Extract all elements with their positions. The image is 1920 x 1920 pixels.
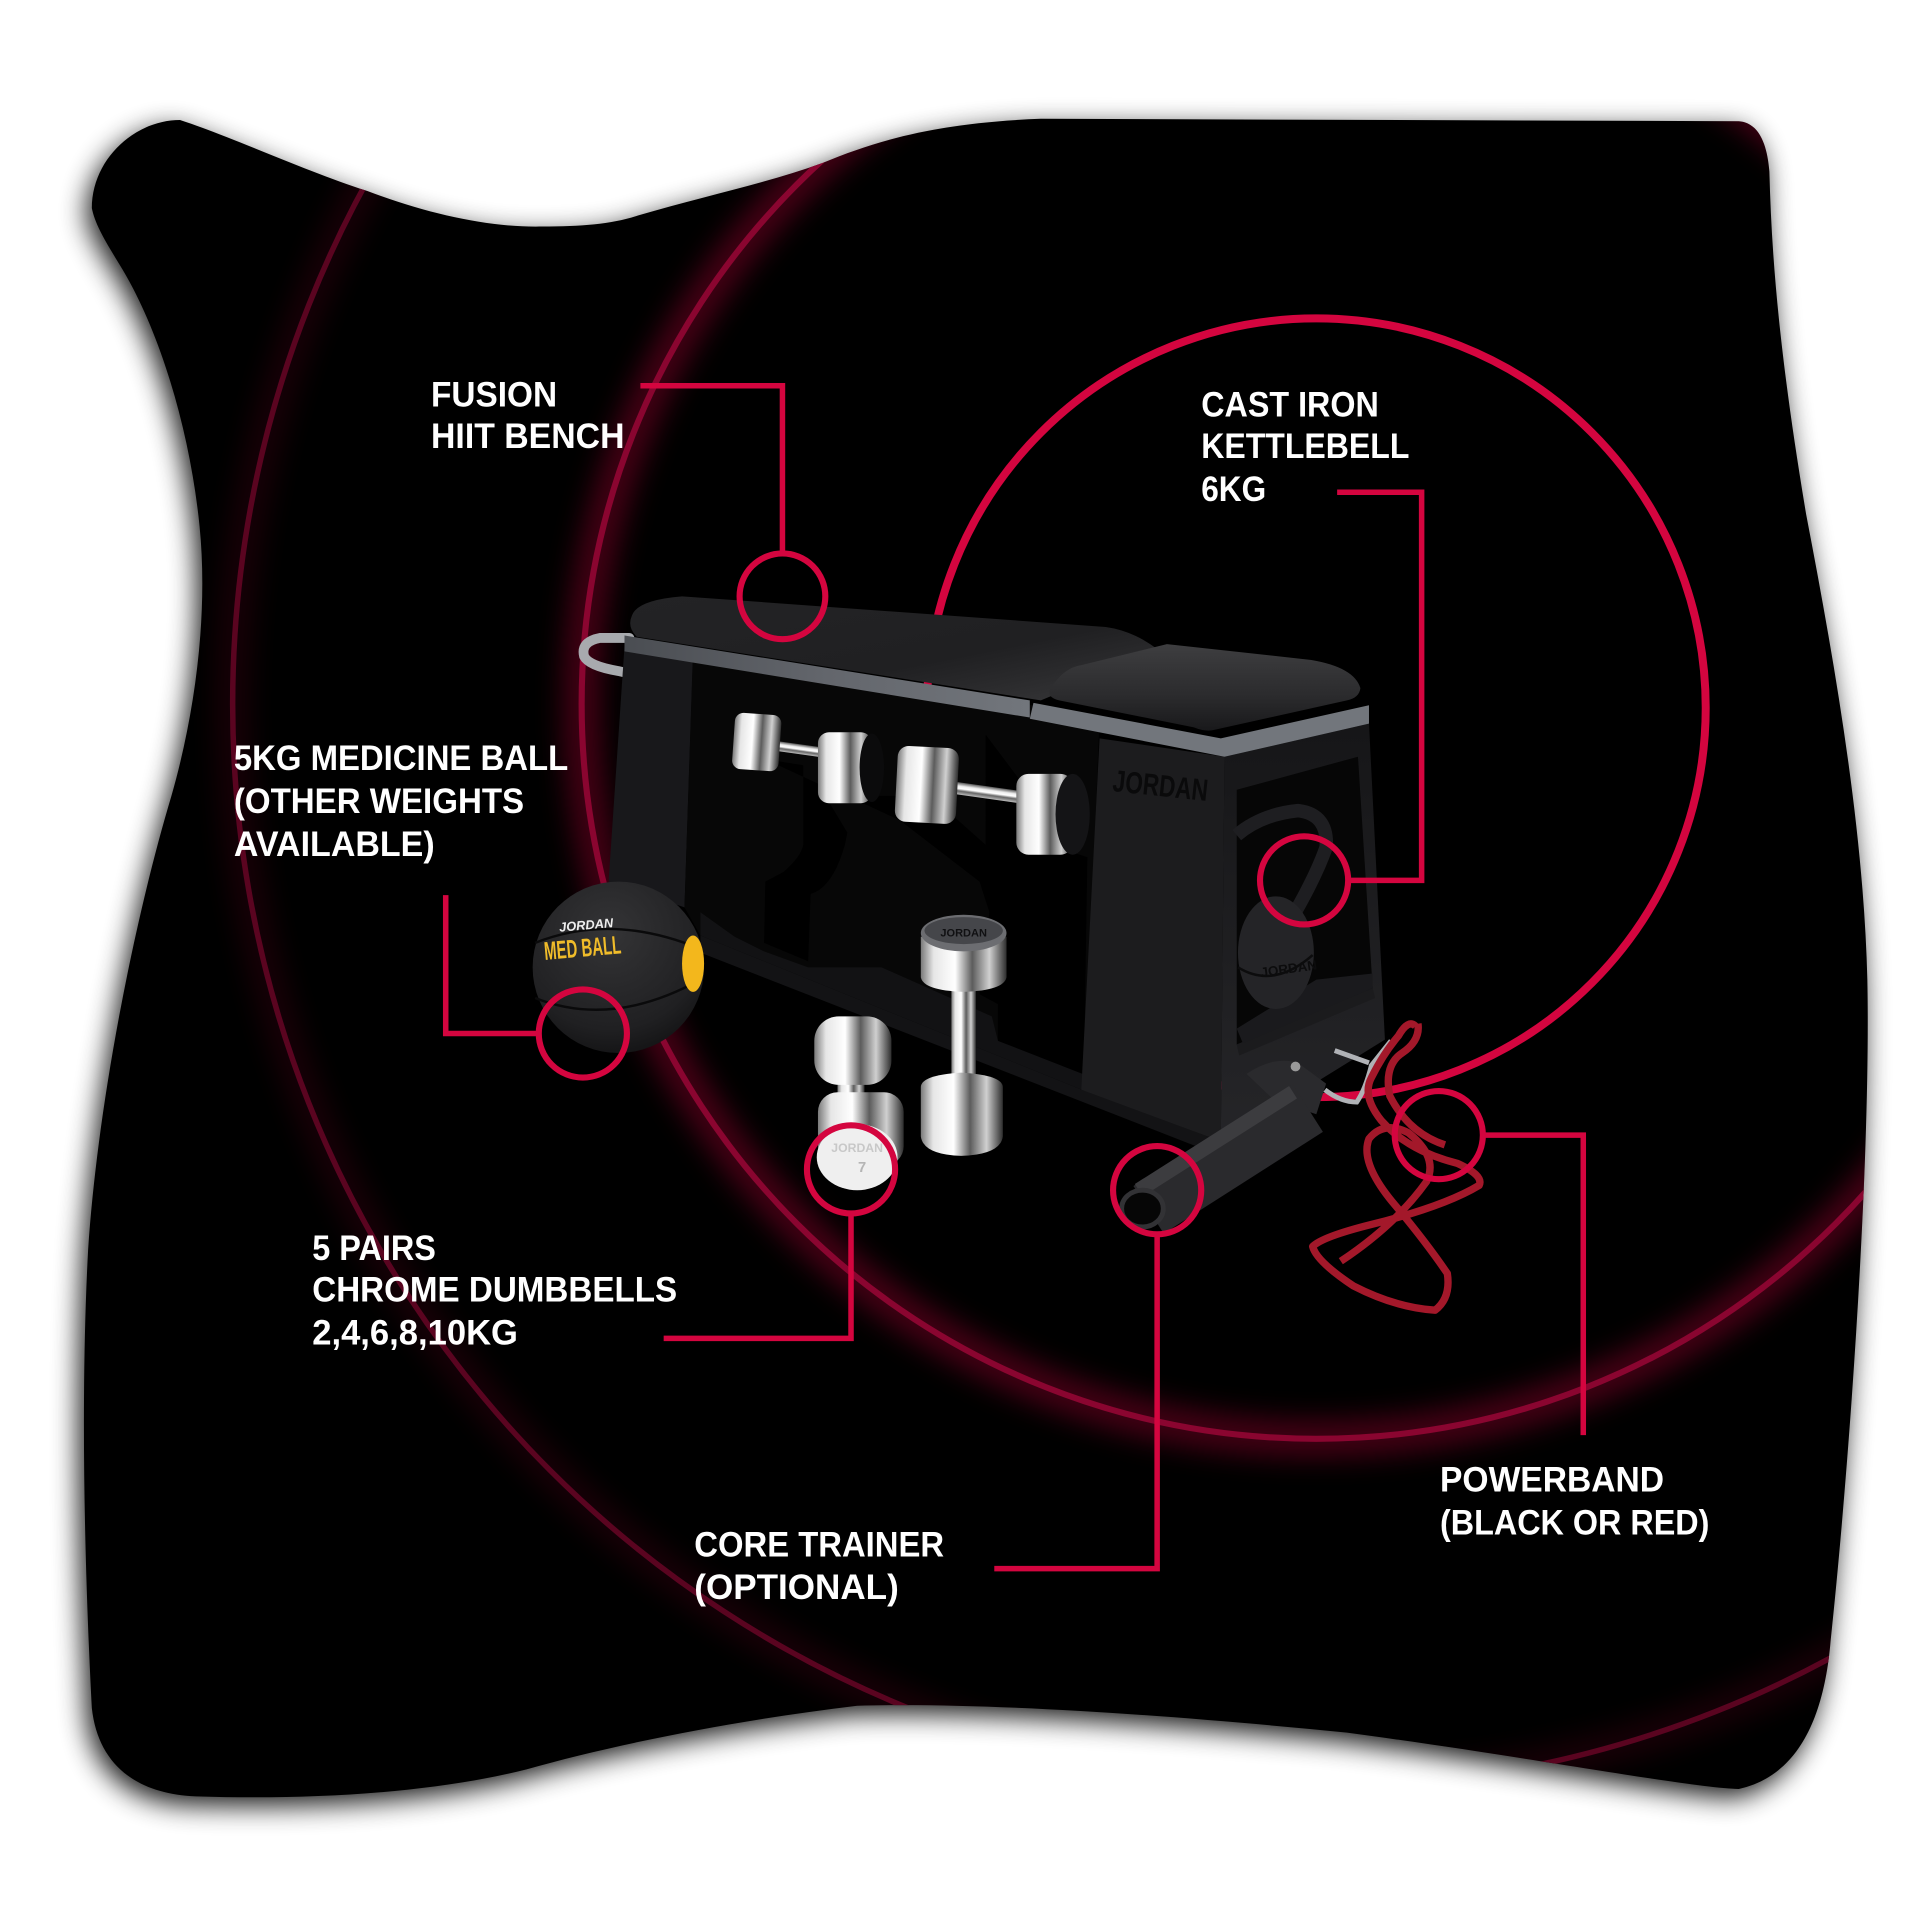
lying dumbbell: JORDAN bbox=[831, 1141, 883, 1155]
callout: kettlebell: CAST IRON bbox=[1201, 384, 1379, 424]
kettlebell: JORDAN bbox=[1260, 957, 1318, 980]
bench right front panel bbox=[1081, 738, 1224, 1141]
medicine ball: JORDAN bbox=[558, 915, 615, 935]
lying dumbbell: 7 bbox=[858, 1160, 866, 1176]
lying dumbbell bbox=[814, 1016, 904, 1190]
seat steel rim bbox=[624, 636, 1030, 718]
bench left leg bbox=[609, 647, 693, 907]
callout: chrome dumbbells: CHROME DUMBBELLS bbox=[312, 1270, 677, 1310]
callout: core trainer: CORE TRAINER bbox=[694, 1524, 944, 1564]
callout: kettlebell: KETTLEBELL bbox=[1201, 426, 1409, 466]
main seat pad bbox=[630, 596, 1157, 700]
branded lettering on bench: JORDAN bbox=[1111, 764, 1210, 808]
core trainer bbox=[1122, 1061, 1326, 1227]
bench handle bbox=[584, 638, 671, 683]
callout: Fusion HIIT Bench: FUSION bbox=[431, 375, 557, 415]
callout: powerband: POWERBAND bbox=[1440, 1459, 1664, 1499]
bench right side panel bbox=[1221, 724, 1385, 1141]
callout: powerband bbox=[1395, 1091, 1709, 1542]
callout: medicine ball: 5KG MEDICINE BALL bbox=[234, 738, 568, 778]
callout: chrome dumbbells bbox=[312, 1125, 895, 1352]
hook and pin bbox=[1325, 1041, 1391, 1102]
callout: core trainer bbox=[694, 1146, 1201, 1607]
callout: kettlebell: 6KG bbox=[1201, 469, 1266, 509]
callout: medicine ball bbox=[234, 738, 627, 1078]
callout: Fusion HIIT Bench bbox=[431, 375, 825, 639]
powerband bbox=[1313, 1024, 1480, 1310]
racked dumbbell 1 bbox=[732, 712, 884, 803]
kettlebell bbox=[1237, 811, 1326, 1009]
callout: medicine ball: AVAILABLE) bbox=[234, 824, 435, 864]
medicine ball: MED BALL bbox=[543, 931, 622, 966]
callout: Fusion HIIT Bench: HIIT BENCH bbox=[431, 416, 624, 456]
callout: medicine ball: (OTHER WEIGHTS bbox=[234, 781, 524, 821]
racked dumbbell 2 bbox=[894, 745, 1090, 855]
medicine ball bbox=[533, 882, 704, 1053]
callout: core trainer: (OPTIONAL) bbox=[694, 1567, 899, 1607]
small seat pad bbox=[1049, 644, 1360, 731]
callout: kettlebell bbox=[1201, 384, 1422, 924]
standing dumbbell: JORDAN bbox=[940, 928, 987, 940]
product: Fusion HIIT bench bbox=[533, 596, 1480, 1310]
callout: chrome dumbbells: 2,4,6,8,10KG bbox=[312, 1312, 518, 1352]
standing dumbbell bbox=[921, 915, 1007, 1156]
rack partitions bbox=[700, 735, 1087, 1091]
side cubby opening bbox=[1237, 757, 1373, 1044]
callout: powerband: (BLACK OR RED) bbox=[1440, 1502, 1709, 1542]
bench base strip bbox=[700, 936, 1221, 1156]
bench interior recess bbox=[684, 649, 1100, 1091]
callout: chrome dumbbells: 5 PAIRS bbox=[312, 1228, 436, 1268]
